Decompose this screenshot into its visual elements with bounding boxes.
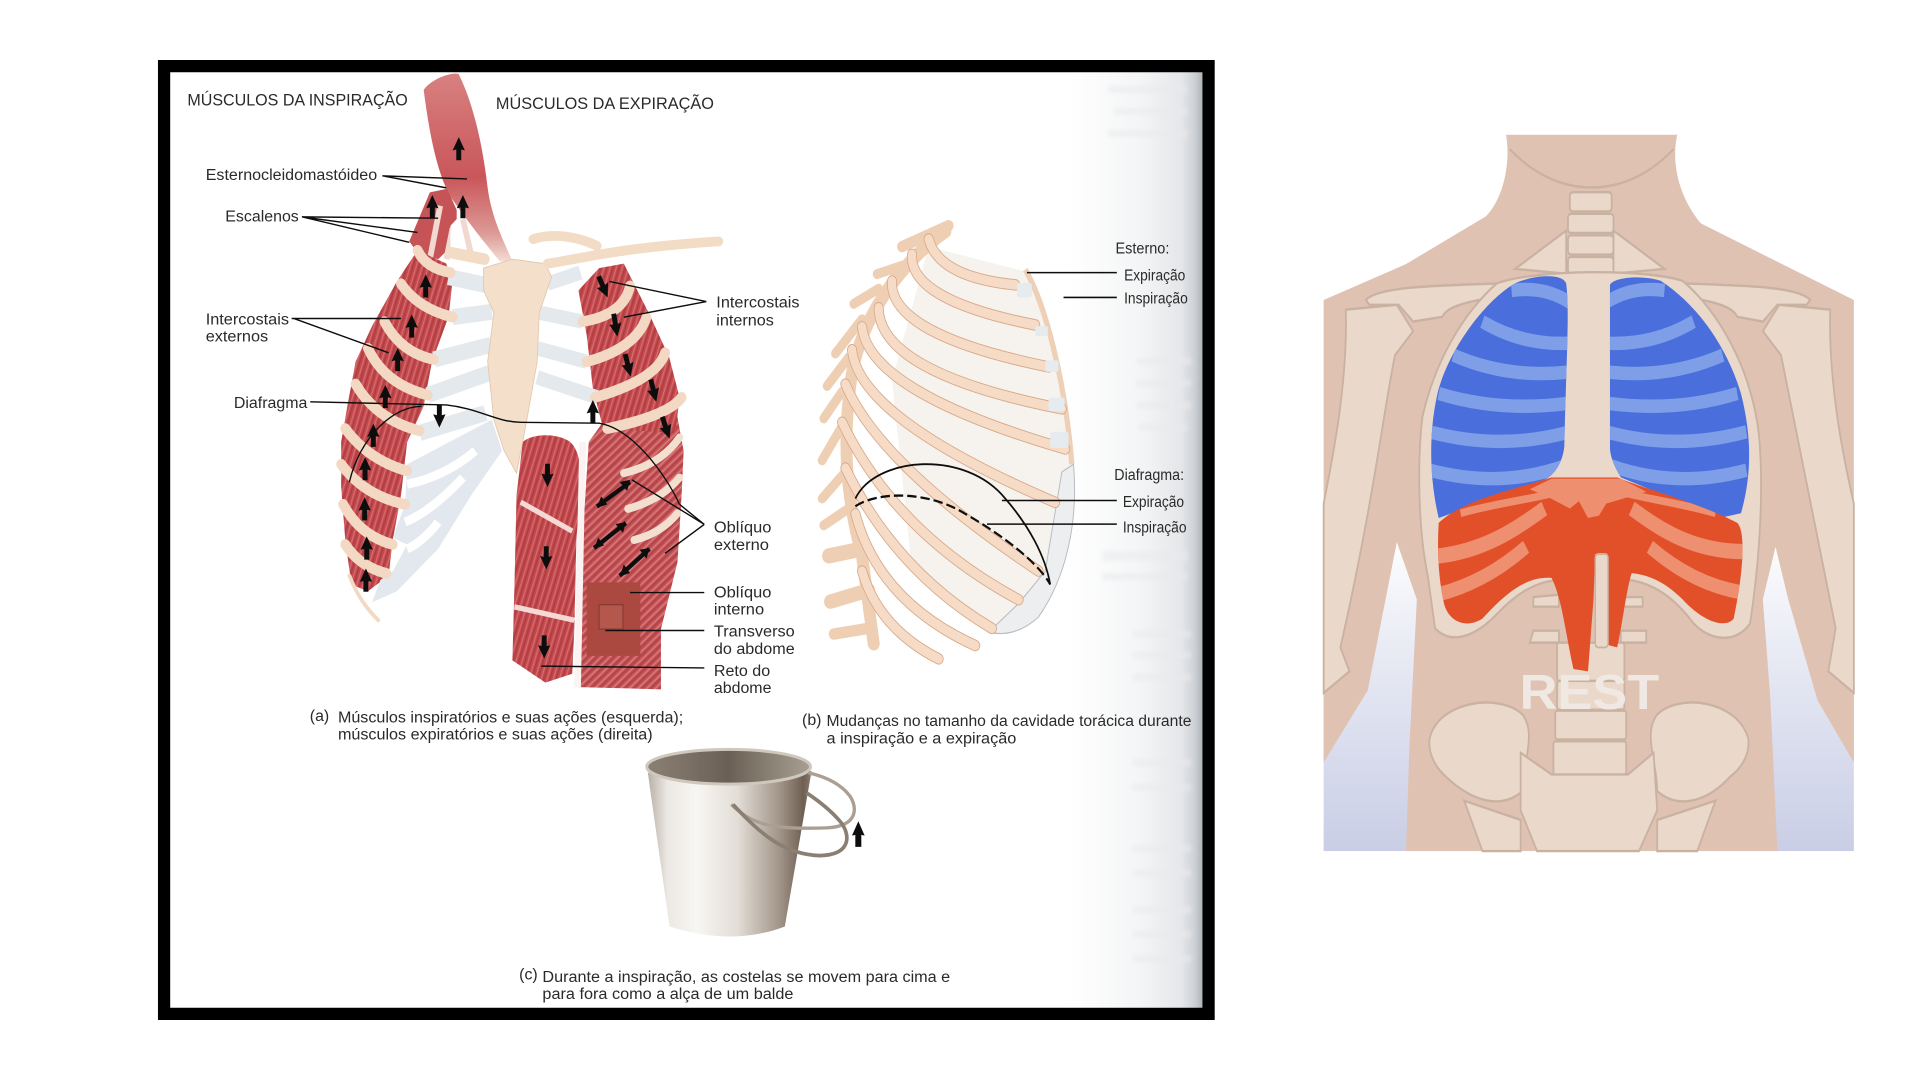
lavender background gaps xyxy=(1324,532,1854,851)
labels of figure (a): Diafragma xyxy=(234,395,307,412)
ischium parts xyxy=(1464,801,1715,851)
clavicles xyxy=(1366,281,1573,322)
spine strip through diaphragm xyxy=(1595,554,1608,647)
lumbar spine xyxy=(1553,643,1626,775)
upper chest bone lines xyxy=(1515,231,1664,274)
labels of figure (a): Oblíquo xyxy=(714,520,772,537)
diaphragm in inspiration: dashed curve xyxy=(855,496,1050,584)
labels of figure (a): interno xyxy=(714,602,764,619)
caption of figure (c) xyxy=(519,967,950,1003)
left lung xyxy=(1431,276,1568,518)
cartilage tips xyxy=(1017,283,1069,448)
ribs outline xyxy=(842,239,1065,659)
labels of figure (b) xyxy=(802,240,1192,747)
figure (a): muscles of inspiration and expiration xyxy=(187,74,800,744)
left costal cartilages xyxy=(420,277,492,433)
drawing: thorax with muscles xyxy=(292,74,719,689)
labels of figure (a): do abdome xyxy=(714,641,795,658)
labels of figure (b): Mudanças no tamanho da cavidade torácica durante xyxy=(827,713,1192,730)
right ribs xyxy=(583,286,682,429)
linea alba xyxy=(578,442,583,687)
neck vertebrae xyxy=(1568,192,1614,274)
scalene muscles xyxy=(409,189,457,259)
sacrum xyxy=(1521,753,1657,851)
labels of figure (a): Esternocleidomastóideo xyxy=(206,167,377,184)
left lower costal margin xyxy=(372,420,502,602)
sternum xyxy=(484,259,552,473)
transverse abdominis window xyxy=(599,605,623,629)
figure (b): thoracic cavity side view xyxy=(802,226,1192,747)
spinous processes xyxy=(822,226,949,644)
diaphragm in expiration: solid curve xyxy=(855,464,1050,584)
left iliac bone xyxy=(1429,702,1529,801)
labels of figure (b): Inspiração xyxy=(1124,291,1188,308)
right humerus and shoulder xyxy=(1763,305,1854,693)
labels of figure (b): Diafragma: xyxy=(1114,467,1184,484)
action arrows xyxy=(358,137,675,659)
right iliac bone xyxy=(1651,702,1749,801)
central tendon xyxy=(1530,479,1646,518)
ribs under the oblique xyxy=(624,437,680,540)
bucket handle xyxy=(731,773,854,828)
labels of figure (a): Transverso xyxy=(714,624,795,641)
skeleton xyxy=(1324,149,1854,851)
left ribs xyxy=(341,250,453,620)
panel: diaphragm and lungs at rest xyxy=(1324,135,1854,851)
lower costal margin xyxy=(989,464,1075,634)
rectus abdominis muscle xyxy=(512,435,581,683)
vertebral column xyxy=(846,231,945,644)
labels of figure (a): MÚSCULOS DA EXPIRAÇÃO xyxy=(496,94,714,113)
internal oblique window xyxy=(587,582,640,656)
labels of figure (a): externos xyxy=(206,329,268,346)
labels of figure (a): Escalenos xyxy=(225,209,299,226)
labels of figure (a): (a) xyxy=(310,708,329,725)
sternocleidomastoid muscle xyxy=(424,74,512,261)
caption of figure (c): para fora como a alça de um balde xyxy=(542,986,794,1003)
drawing: lateral rib cage xyxy=(822,226,1117,659)
labels of figure (b): a inspiração e a expiração xyxy=(827,730,1016,747)
labels of figure (a): Intercostais xyxy=(716,294,800,311)
right costal cartilages xyxy=(537,273,597,397)
labels of figure (a): Músculos inspiratórios e suas ações (esquerda); xyxy=(338,709,683,726)
page background with black border xyxy=(164,66,1209,1014)
caption of figure (c): Durante a inspiração, as costelas se movem para cima e xyxy=(542,969,950,986)
up arrow xyxy=(852,821,865,847)
rib cage around the lungs xyxy=(1419,272,1761,638)
leader lines xyxy=(292,176,706,668)
right internal intercostal muscles xyxy=(578,264,680,433)
labels of figure (a): músculos expiratórios e suas ações (direita) xyxy=(338,727,653,744)
left humerus and shoulder xyxy=(1324,305,1413,693)
faint bleed-through text from the reverse page xyxy=(1102,86,1191,962)
figure (c): bucket analogy xyxy=(519,749,950,1003)
status label: REST: REST xyxy=(1520,666,1659,720)
body silhouette xyxy=(1324,135,1854,851)
labels of figure (b): (b) xyxy=(802,712,821,729)
panel: textbook figure with black frame xyxy=(164,66,1209,1014)
right lung xyxy=(1610,277,1750,517)
labels of figure (a): Reto do xyxy=(714,663,770,680)
labels of figure (b): Expiração xyxy=(1124,267,1185,284)
ribs fill xyxy=(842,239,1065,659)
labels of figure (b): Expiração xyxy=(1123,494,1184,511)
labels of figure (a): abdome xyxy=(714,680,772,697)
white gap between scalenes and sternocleidomastoid xyxy=(451,217,460,248)
leader lines xyxy=(987,273,1117,524)
left external intercostal muscles xyxy=(341,250,453,591)
bucket body xyxy=(648,771,812,936)
lower ribs xyxy=(1530,595,1646,643)
labels of figure (b): Inspiração xyxy=(1123,520,1187,537)
labels of figure (a): Intercostais xyxy=(206,311,289,328)
diaphragm fibre stripes xyxy=(1435,492,1745,595)
labels of figure (a): internos xyxy=(716,313,774,330)
caption of figure (c): (c) xyxy=(519,967,538,984)
clavicles xyxy=(533,236,719,264)
neck line xyxy=(1510,149,1674,187)
labels of figure (a): externo xyxy=(714,537,769,554)
labels of figure (b): Esterno: xyxy=(1116,240,1169,257)
sternum side xyxy=(1025,270,1072,464)
interior fill of rib cage xyxy=(892,247,1074,634)
drawing: bucket with handle xyxy=(647,749,865,936)
labels of figure (a): MÚSCULOS DA INSPIRAÇÃO xyxy=(187,90,408,109)
diaphragm xyxy=(1438,477,1743,672)
bucket opening xyxy=(647,749,811,784)
labels of figure (a): Oblíquo xyxy=(714,585,772,602)
external oblique muscle xyxy=(578,406,684,689)
labels of figure (a) xyxy=(187,90,800,744)
